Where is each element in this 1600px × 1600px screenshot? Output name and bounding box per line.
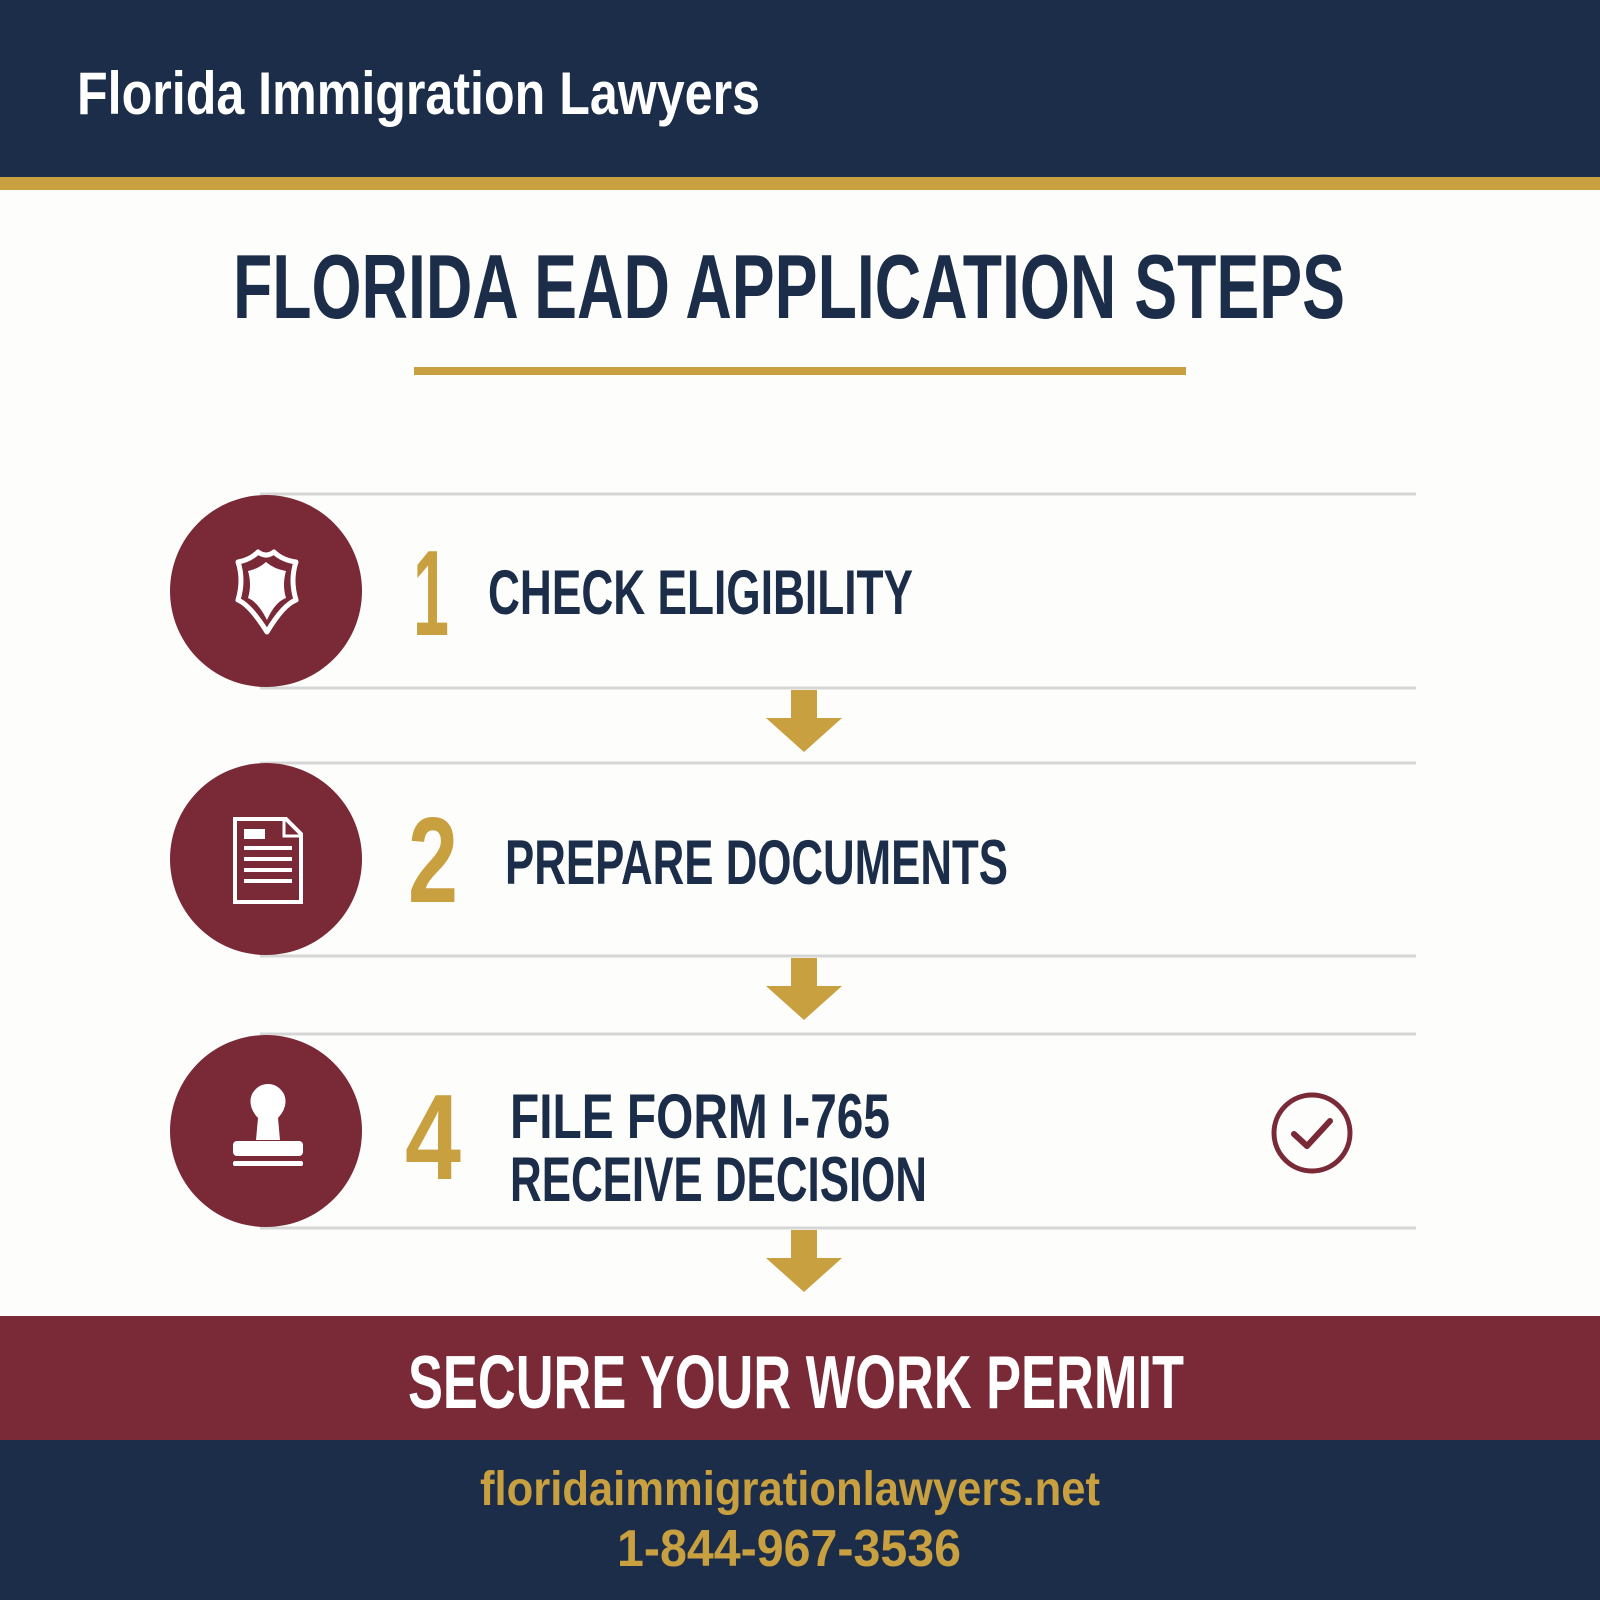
step rows lines <box>260 494 1416 1228</box>
call to action band <box>0 1316 1600 1440</box>
step 3 label: FILE FORM I-765 <box>510 1082 890 1152</box>
title underline <box>414 367 1186 375</box>
header bar <box>0 0 1600 190</box>
step 3 <box>170 1035 1350 1227</box>
website: floridaimmigrationlawyers.net <box>480 1463 1100 1516</box>
icon: document <box>170 763 362 955</box>
number 2: 2 <box>408 792 458 928</box>
step 2 label: PREPARE DOCUMENTS <box>505 828 1008 898</box>
step 1 <box>170 495 913 687</box>
arrow 1 <box>766 690 842 752</box>
number 4: 4 <box>405 1069 461 1205</box>
phone: 1-844-967-3536 <box>617 1520 961 1578</box>
icon: stamp <box>170 1035 362 1227</box>
step 2 <box>170 763 1008 955</box>
call to action band: SECURE YOUR WORK PERMIT <box>408 1340 1184 1424</box>
number 1: 1 <box>413 525 449 661</box>
arrow 3 <box>766 1230 842 1292</box>
footer <box>0 1440 1600 1600</box>
step 1 label: CHECK ELIGIBILITY <box>488 558 913 628</box>
step 3 label: RECEIVE DECISION <box>510 1145 927 1215</box>
header text: Florida Immigration Lawyers <box>77 60 760 127</box>
arrow 2 <box>766 958 842 1020</box>
step 3 label <box>510 1082 927 1215</box>
icon: shield <box>170 495 362 687</box>
icon: check circle <box>1274 1095 1350 1171</box>
